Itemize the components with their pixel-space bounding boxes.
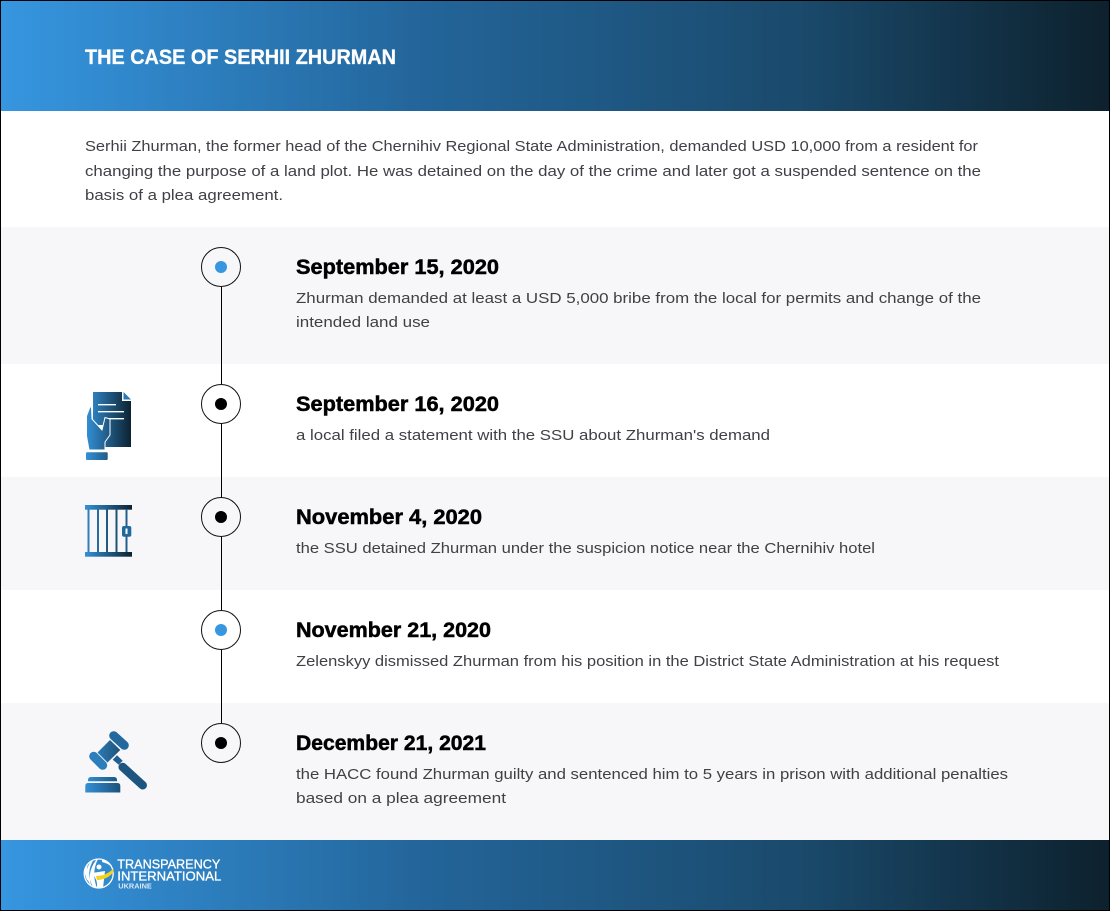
intro paragraph: changing the purpose of a land plot. He was detained on the day of the crime and later got a suspended sentence on the: [85, 163, 981, 180]
footer banner: [1, 840, 1109, 910]
icon: judge gavel: [85, 736, 143, 792]
header banner: [1, 1, 1109, 111]
event: November 4, 2020: the SSU detained Zhurman under the suspicion notice near the Chernihiv hotel: [296, 540, 875, 557]
event: September 16, 2020: a local filed a statement with the SSU about Zhurman's demand: [296, 427, 770, 444]
event: November 21, 2020: November 21, 2020: [296, 619, 491, 642]
icon: hand holding document: [86, 392, 131, 460]
event: November 21, 2020: [296, 619, 1000, 670]
band: row 1 background: [1, 227, 1109, 364]
event: December 21, 2021: [296, 732, 1008, 807]
event: September 15, 2020: [296, 256, 981, 331]
band: row 3 background: [1, 477, 1109, 590]
event: September 15, 2020: Zhurman demanded at least a USD 5,000 bribe from the local for permits and change of the: [296, 290, 981, 307]
event: September 15, 2020: September 15, 2020: [296, 256, 499, 279]
intro paragraph: basis of a plea agreement.: [85, 187, 283, 204]
logo: Transparency International Ukraine: INTERNATIONAL: [117, 870, 221, 884]
logo: Transparency International Ukraine: TRANSPARENCY: [117, 858, 221, 872]
icon: prison bars: [85, 505, 132, 557]
timeline marker 2: [202, 384, 240, 424]
logo: Transparency International Ukraine: UKRAINE: [118, 884, 152, 891]
event: September 16, 2020: [296, 393, 770, 444]
event: September 16, 2020: September 16, 2020: [296, 393, 499, 416]
event: November 4, 2020: [296, 506, 875, 557]
timeline marker 1: [202, 248, 240, 286]
event: November 21, 2020: Zelenskyy dismissed Zhurman from his position in the District State Administration at his request: [296, 653, 1000, 670]
timeline marker 3: [202, 498, 240, 536]
timeline marker 5: [202, 724, 240, 762]
timeline connector line: [221, 287, 222, 723]
event: December 21, 2021: December 21, 2021: [296, 732, 486, 755]
logo: Transparency International Ukraine: [84, 858, 221, 891]
timeline marker 4: [202, 610, 240, 650]
intro paragraph: [85, 138, 981, 204]
event: December 21, 2021: based on a plea agreement: [296, 790, 507, 807]
intro paragraph: Serhii Zhurman, the former head of the Chernihiv Regional State Administration, demanded USD 10,000 from a resident for: [85, 138, 978, 155]
event: November 4, 2020: November 4, 2020: [296, 506, 482, 529]
band: row 5 background: [1, 703, 1109, 840]
event: December 21, 2021: the HACC found Zhurman guilty and sentenced him to 5 years in prison with additional penalties: [296, 766, 1008, 783]
title: THE CASE OF SERHII ZHURMAN: [85, 46, 396, 69]
event: September 15, 2020: intended land use: [296, 314, 430, 331]
